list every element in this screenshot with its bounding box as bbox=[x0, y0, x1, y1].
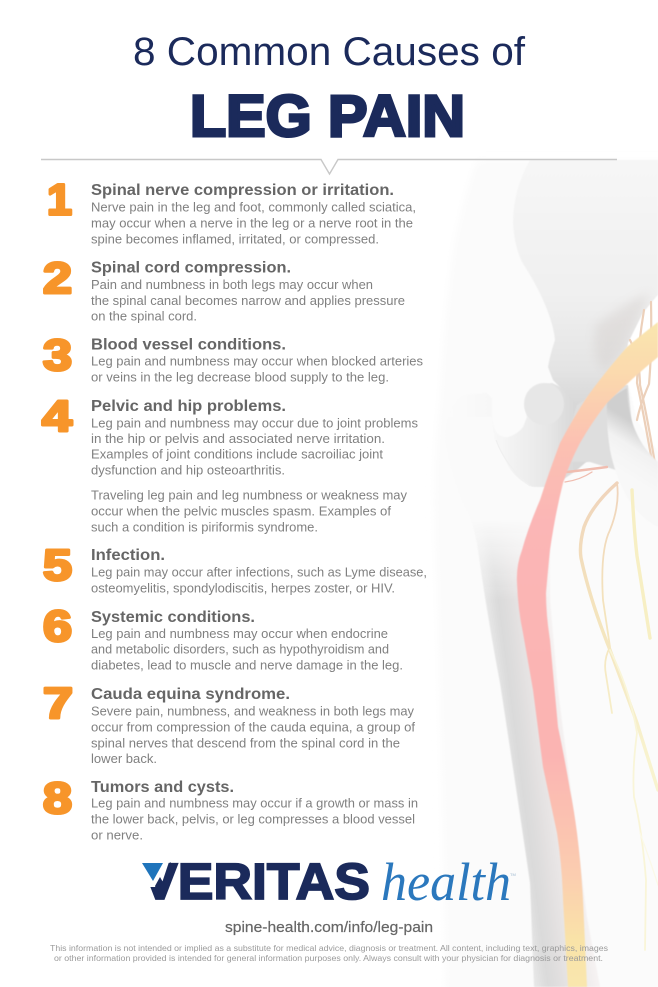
cause 7 body: spinal nerves that descend from the spinal cord in the bbox=[91, 736, 400, 750]
cause 3 heading: Blood vessel conditions. bbox=[91, 336, 286, 354]
pink branch upper bbox=[567, 467, 607, 472]
number 3: 3 bbox=[43, 331, 72, 380]
branch A bbox=[580, 483, 658, 790]
cause 7 body: Severe pain, numbness, and weakness in both legs may bbox=[91, 704, 415, 718]
number 5: 5 bbox=[43, 541, 72, 590]
cause 8 body: or nerve. bbox=[91, 828, 143, 842]
cause 3 bbox=[43, 331, 423, 384]
branch D bbox=[610, 650, 646, 950]
cause 7 body: occur from compression of the cauda equina, a group of bbox=[91, 720, 415, 734]
cause 1 body: spine becomes inflamed, irritated, or compressed. bbox=[91, 232, 379, 246]
cause 4 second paragraph: occur when the pelvic muscles spasm. Examples of bbox=[91, 504, 391, 518]
cause 1 body: Nerve pain in the leg and foot, commonly called sciatica, bbox=[91, 200, 416, 214]
branch C bbox=[632, 490, 650, 638]
disclaimer bbox=[50, 943, 608, 963]
tan nerve strand one bbox=[637, 310, 653, 467]
branch B bbox=[602, 483, 618, 713]
title line: 8 Common Causes of bbox=[133, 30, 526, 74]
cause 4 first paragraph bbox=[91, 416, 418, 478]
cause 8 body: Leg pain and numbness may occur if a growth or mass in bbox=[91, 796, 418, 810]
pubic ramus band bbox=[607, 388, 658, 527]
cause 3 body bbox=[91, 354, 423, 384]
cause 1 body: may occur when a nerve in the leg or a nerve root in the bbox=[91, 216, 413, 230]
logo V inner stroke bbox=[155, 862, 176, 899]
cause 5 heading: Infection. bbox=[91, 547, 165, 564]
cause 4 first paragraph: Leg pain and numbness may occur due to joint problems bbox=[91, 416, 418, 430]
cause 2 body: the spinal canal becomes narrow and applies pressure bbox=[91, 293, 405, 308]
femur shaft bbox=[480, 540, 599, 987]
disclaimer: or other information provided is intended for general information purposes only. Always consult with your physician for diagnosis or treatment. bbox=[54, 953, 603, 963]
leg pain heading: LEG PAIN bbox=[190, 84, 465, 149]
logo wordmark: VERITAS bbox=[142, 853, 370, 910]
femur neck lower outline bbox=[496, 440, 530, 486]
cause 4 second paragraph bbox=[91, 488, 408, 534]
cause 8 body bbox=[91, 796, 418, 842]
cause 6 heading: Systemic conditions. bbox=[91, 609, 255, 626]
number 4: 4 bbox=[42, 392, 73, 441]
source url: spine-health.com/info/leg-pain bbox=[225, 920, 433, 936]
cause 6 body: diabetes, lead to muscle and nerve damage in the leg. bbox=[91, 658, 403, 672]
cause 6 bbox=[43, 602, 403, 672]
cause 4 bbox=[42, 392, 418, 534]
cause 4 second paragraph: such a condition is piriformis syndrome. bbox=[91, 520, 318, 534]
cause 8 heading: Tumors and cysts. bbox=[91, 779, 234, 796]
logo trademark: TM bbox=[510, 872, 516, 877]
grey area under nerve bbox=[566, 385, 632, 470]
cause 4 first paragraph: in the hip or pelvis and associated nerve irritation. bbox=[91, 431, 385, 446]
cause 4 second paragraph: Traveling leg pain and leg numbness or weakness may bbox=[91, 488, 408, 502]
cause 2 heading: Spinal cord compression. bbox=[91, 260, 291, 276]
number 7: 7 bbox=[43, 679, 73, 728]
cause 1 bbox=[47, 176, 416, 246]
cause 7 body bbox=[91, 704, 415, 766]
number 6: 6 bbox=[43, 602, 72, 651]
cause 8 bbox=[43, 774, 418, 842]
cause 2 body bbox=[91, 277, 405, 324]
cause 5 bbox=[43, 541, 427, 596]
cause 1 heading: Spinal nerve compression or irritation. bbox=[91, 182, 394, 199]
anatomy illustration: hip and leg bbox=[475, 160, 658, 987]
logo blue triangle bbox=[142, 863, 163, 881]
number 2: 2 bbox=[43, 254, 72, 303]
number 8: 8 bbox=[43, 774, 72, 823]
cause 1 body bbox=[91, 200, 416, 246]
cause 3 body: Leg pain and numbness may occur when blocked arteries bbox=[91, 354, 423, 368]
divider with notch bbox=[41, 160, 617, 174]
cause 6 body bbox=[91, 626, 403, 672]
disclaimer: This information is not intended or implied as a substitute for medical advice, diagnosis or treatment. All content, including text, graphics, images bbox=[50, 943, 608, 953]
logo: Veritas Health bbox=[138, 852, 516, 912]
cause 7 bbox=[43, 679, 415, 766]
cause 2 body: Pain and numbness in both legs may occur when bbox=[91, 277, 373, 292]
number 1: 1 bbox=[47, 176, 72, 224]
soft tissue silhouette bbox=[435, 160, 658, 987]
branch E bbox=[640, 833, 658, 885]
sciatic nerve branches bbox=[565, 467, 658, 950]
cause 5 body: osteomyelitis, spondylodiscitis, herpes zoster, or HIV. bbox=[91, 580, 395, 596]
ilium pelvis bone bbox=[513, 160, 658, 405]
tan nerve strand two bbox=[637, 302, 651, 420]
pink branch lower bbox=[565, 472, 592, 482]
cause 4 first paragraph: Examples of joint conditions include sacroiliac joint bbox=[91, 446, 383, 462]
cause 6 body: and metabolic disorders, such as hypothyroidism and bbox=[91, 642, 389, 656]
cause 7 heading: Cauda equina syndrome. bbox=[91, 686, 290, 703]
trochanter lower body bbox=[445, 417, 550, 610]
cause 4 first paragraph: dysfunction and hip osteoarthritis. bbox=[91, 462, 285, 478]
pelvic opening bbox=[628, 295, 658, 452]
cause 3 body: or veins in the leg decrease blood supply to the leg. bbox=[91, 370, 389, 384]
cause 7 body: lower back. bbox=[91, 751, 157, 766]
cause 5 body: Leg pain may occur after infections, such as Lyme disease, bbox=[91, 564, 427, 580]
logo health script: health bbox=[381, 852, 511, 912]
cause 4 heading: Pelvic and hip problems. bbox=[91, 398, 286, 415]
logo V notch bbox=[138, 860, 169, 887]
cause 2 bbox=[43, 254, 405, 324]
cause 2 body: on the spinal cord. bbox=[91, 308, 197, 324]
femoral head bbox=[524, 383, 564, 425]
cause 8 body: the lower back, pelvis, or leg compresses a blood vessel bbox=[91, 812, 415, 826]
femoral trochanter, neck and head bbox=[448, 383, 600, 490]
sciatic nerve bbox=[517, 322, 658, 987]
cause 6 body: Leg pain and numbness may occur when endocrine bbox=[91, 626, 388, 641]
pelvis shadow near nerve bbox=[594, 292, 650, 372]
cause 5 body bbox=[91, 564, 427, 596]
tan nerve strand three bbox=[630, 340, 656, 470]
hip nerve bundle bbox=[630, 302, 656, 470]
